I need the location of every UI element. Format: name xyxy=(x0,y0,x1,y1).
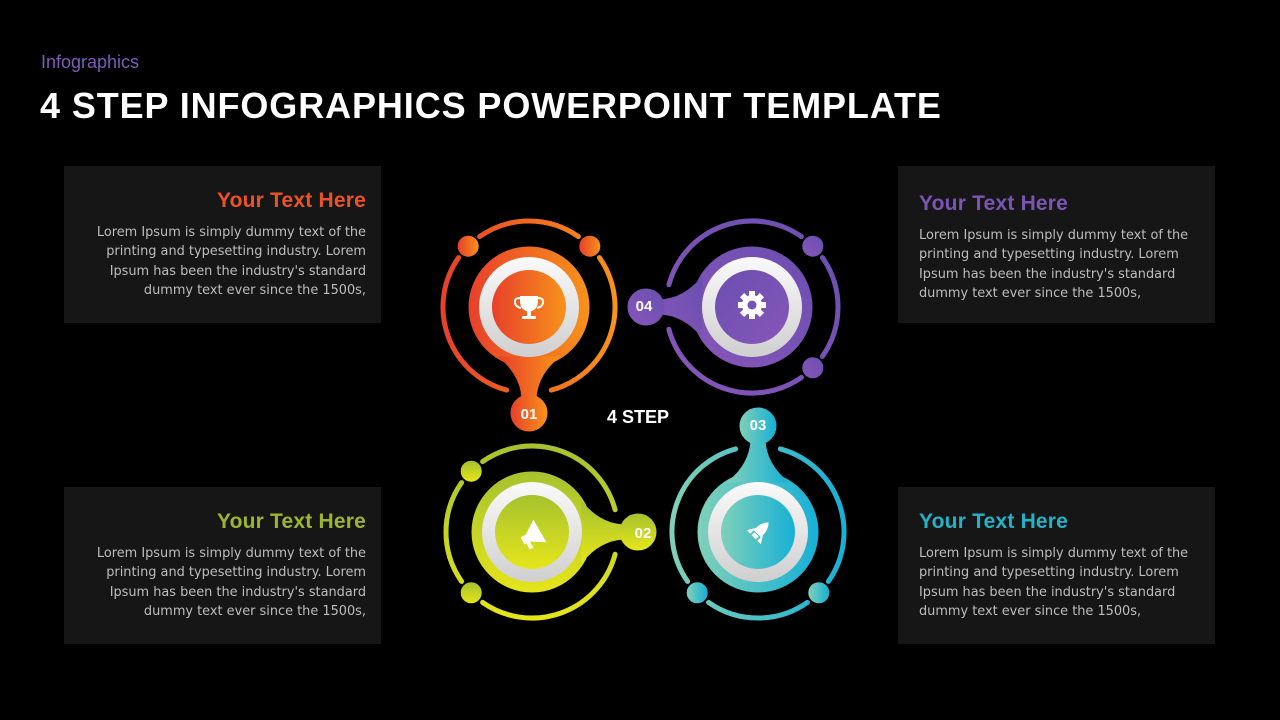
icon: megaphone xyxy=(516,520,546,552)
panel: step 3 text: Your Text Here xyxy=(919,510,1068,533)
icon: trophy xyxy=(515,296,543,319)
panel: step 1 text xyxy=(64,166,381,323)
center label: 4 STEP xyxy=(607,407,669,427)
panel: step 3 text: Lorem Ipsum is simply dummy text of the xyxy=(919,546,1188,561)
panel: step 1 text: Ipsum has been the industry's standard xyxy=(110,264,366,279)
panel: step 4 text: Lorem Ipsum is simply dummy text of the xyxy=(919,228,1188,243)
step numbers: 02 xyxy=(635,525,651,542)
panel: step 3 text: Ipsum has been the industry's standard xyxy=(919,585,1175,600)
panel: step 4 text: Your Text Here xyxy=(919,192,1068,215)
step 2 shape xyxy=(446,446,656,618)
panel: step 1 text: printing and typesetting industry. Lorem xyxy=(106,244,366,259)
step numbers: 01 xyxy=(521,406,537,423)
panel: step 1 text: dummy text ever since the 1500s, xyxy=(144,283,366,298)
panel: step 3 text: dummy text ever since the 1500s, xyxy=(919,604,1141,619)
panel: step 2 text: Ipsum has been the industry's standard xyxy=(110,585,366,600)
icon: gear xyxy=(738,291,766,319)
panel: step 2 text: dummy text ever since the 1500s, xyxy=(144,604,366,619)
panel: step 2 text: Your Text Here xyxy=(217,510,366,533)
subtitle: Infographics xyxy=(41,52,139,72)
step 3 shape xyxy=(672,408,844,618)
panel: step 2 text xyxy=(64,487,381,644)
panel: step 3 text: printing and typesetting industry. Lorem xyxy=(919,565,1179,580)
panel: step 2 text: Lorem Ipsum is simply dummy text of the xyxy=(97,546,366,561)
step numbers: 03 xyxy=(750,417,766,434)
panel: step 3 text xyxy=(898,487,1215,644)
step 1 shape xyxy=(443,221,615,431)
step numbers xyxy=(521,298,766,542)
panel: step 4 text: printing and typesetting industry. Lorem xyxy=(919,247,1179,262)
step numbers: 04 xyxy=(636,298,653,315)
panel: step 2 text: printing and typesetting industry. Lorem xyxy=(106,565,366,580)
icon: rocket xyxy=(747,515,776,544)
panel: step 1 text: Lorem Ipsum is simply dummy text of the xyxy=(97,225,366,240)
panel: step 4 text xyxy=(898,166,1215,323)
panel: step 4 text: Ipsum has been the industry's standard xyxy=(919,267,1175,282)
panel: step 4 text: dummy text ever since the 1500s, xyxy=(919,286,1141,301)
white rings and inner discs xyxy=(479,257,808,582)
panel: step 1 text: Your Text Here xyxy=(217,189,366,212)
step 4 shape xyxy=(628,221,838,393)
title: 4 STEP INFOGRAPHICS POWERPOINT TEMPLATE xyxy=(40,85,942,126)
